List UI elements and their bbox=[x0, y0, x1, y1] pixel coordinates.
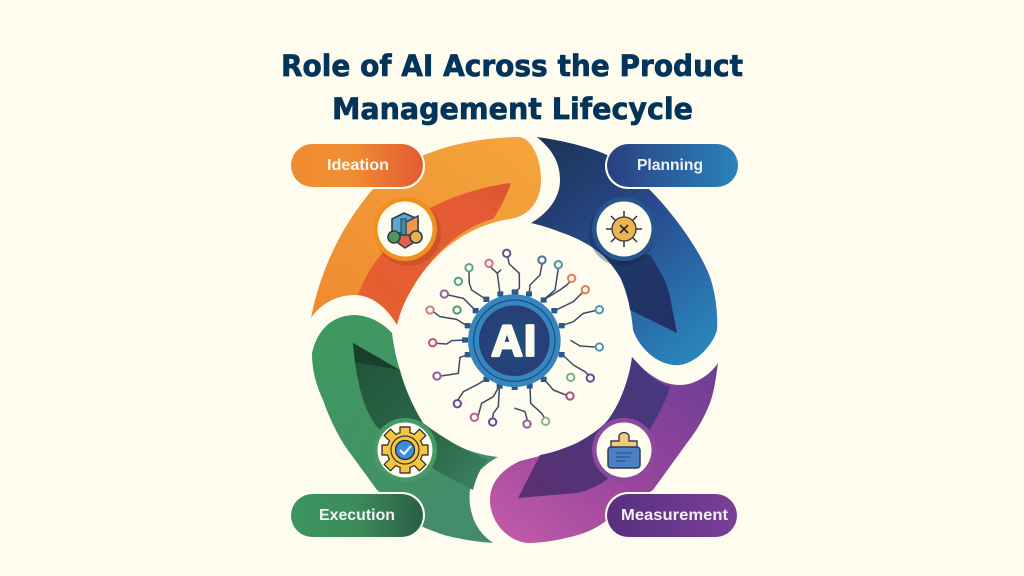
pill: Execution bbox=[290, 492, 425, 538]
badge: planning sun icon bbox=[589, 197, 656, 266]
pill: Execution: Execution bbox=[319, 507, 395, 524]
chip body bbox=[468, 294, 561, 387]
title bbox=[281, 49, 743, 126]
pill: Measurement: Measurement bbox=[621, 507, 728, 524]
badge: measurement folder icon bbox=[592, 418, 656, 482]
badge: execution gear icon bbox=[373, 418, 437, 482]
AI label: AI bbox=[491, 317, 537, 365]
badge: ideation cubes icon bbox=[373, 197, 441, 266]
title: Role of AI Across the Product bbox=[281, 49, 743, 83]
pill: Ideation bbox=[290, 143, 425, 189]
circuit traces bbox=[433, 257, 595, 420]
chip pads bbox=[462, 289, 565, 390]
pill: Measurement bbox=[605, 492, 739, 538]
segment: ideation bbox=[311, 137, 541, 325]
segment: measurement bbox=[490, 357, 718, 543]
pill: Ideation: Ideation bbox=[327, 157, 389, 174]
AI chip with circuit traces bbox=[426, 250, 603, 428]
segment: planning bbox=[531, 137, 717, 365]
circuit nodes bbox=[426, 250, 603, 428]
pill: Planning: Planning bbox=[637, 157, 703, 174]
title: Management Lifecycle bbox=[332, 92, 693, 126]
segment: execution bbox=[312, 315, 498, 543]
pill: Planning bbox=[605, 143, 739, 189]
